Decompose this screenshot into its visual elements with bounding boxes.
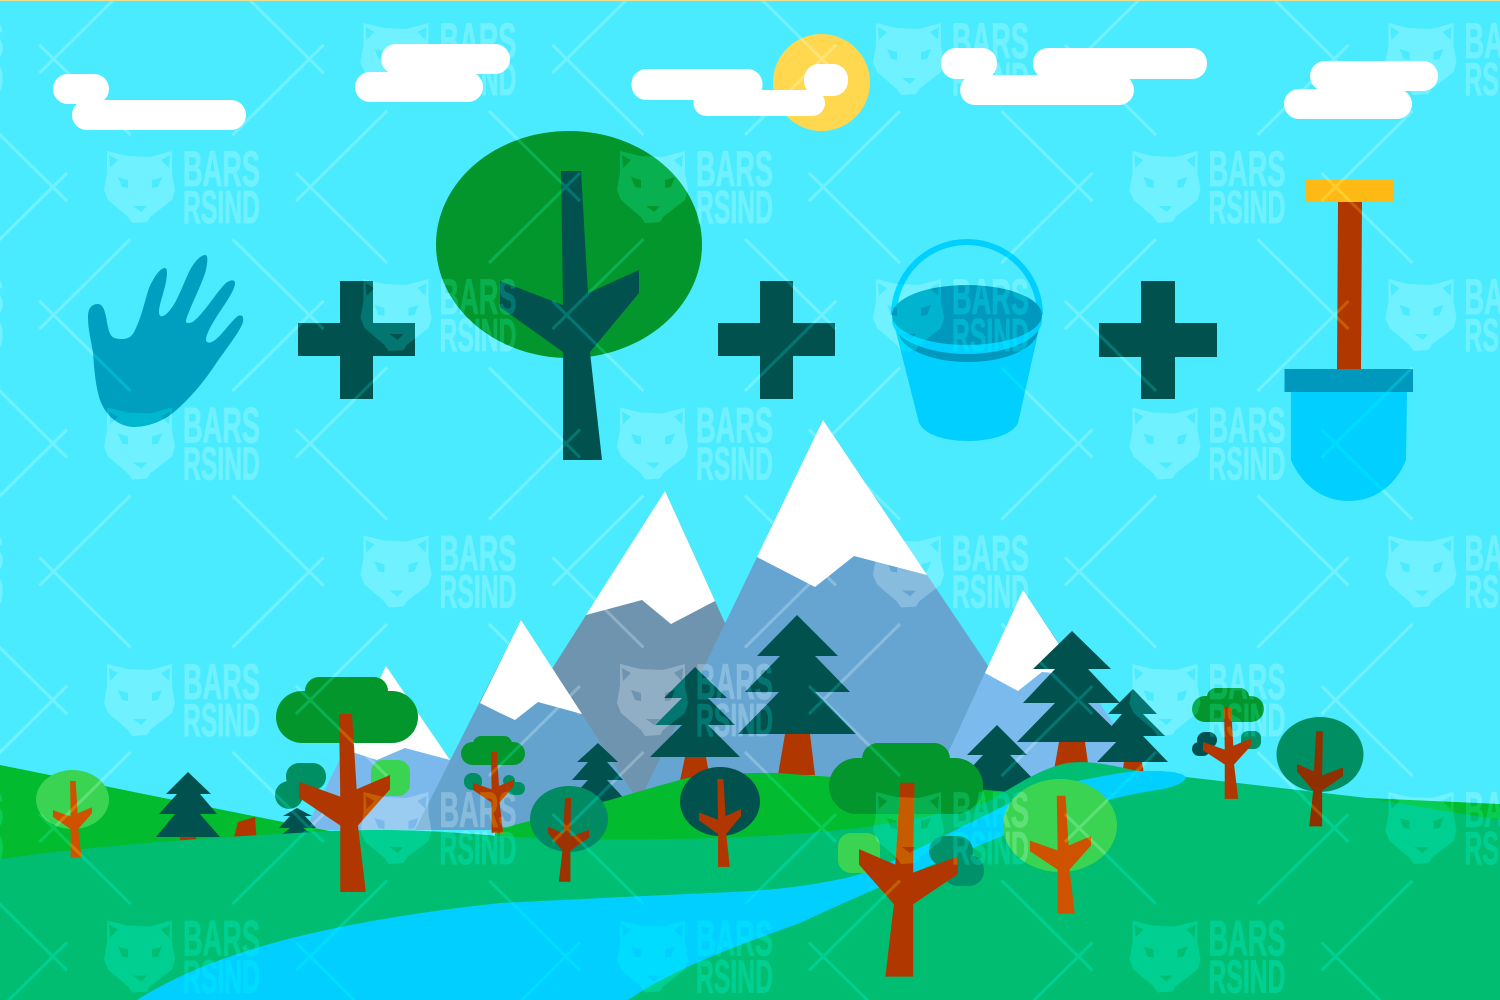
watermark pattern: BARS	[183, 398, 260, 454]
mountain: left blue	[415, 620, 657, 830]
watermark pattern: RSIND	[696, 181, 773, 233]
watermark pattern: BARS	[696, 910, 773, 966]
watermark pattern: BARS	[440, 13, 517, 69]
watermark pattern: RSIND	[952, 822, 1029, 874]
watermark pattern: RSIND	[696, 438, 773, 490]
watermark pattern: BARS	[1208, 910, 1286, 966]
icon: bucket	[892, 242, 1042, 441]
mountain: tallest	[640, 420, 1085, 810]
plus sign 2	[718, 281, 835, 399]
watermark pattern: BARS	[952, 526, 1029, 582]
watermark pattern: RSIND	[183, 181, 260, 233]
tree: small canopy	[461, 736, 525, 833]
watermark pattern: BARS	[183, 141, 260, 197]
watermark pattern: RSIND	[952, 566, 1029, 618]
watermark pattern: RSIND	[1208, 694, 1286, 746]
watermark pattern: RSIND	[440, 566, 516, 618]
watermark pattern: BARS	[1208, 141, 1286, 197]
tree: teal round right	[1276, 717, 1364, 826]
watermark pattern: BARS	[440, 526, 517, 582]
watermark pattern: BARS	[183, 654, 260, 710]
river	[137, 771, 1186, 1000]
tree: large canopy centre	[829, 743, 984, 977]
watermark pattern: BARS	[952, 269, 1029, 325]
watermark pattern: RSIND	[952, 309, 1029, 361]
mountain: far left	[305, 666, 498, 830]
plus sign 1	[298, 281, 415, 399]
icon: hand	[88, 255, 243, 427]
watermark pattern: BARS	[1208, 654, 1286, 710]
pine trees on the mountains	[563, 615, 1168, 807]
watermark pattern: RSIND	[440, 822, 516, 874]
clouds	[53, 44, 1438, 130]
watermark pattern: BARS	[696, 654, 773, 710]
tree: dark round	[680, 767, 760, 867]
mountain: grey	[494, 491, 760, 830]
tree: teal round	[530, 786, 608, 882]
watermark pattern: BARS	[440, 782, 517, 838]
icon: big tree	[436, 131, 702, 460]
watermark pattern: BARS	[952, 13, 1029, 69]
tree: light green right	[1003, 779, 1117, 914]
plus sign 3	[1099, 281, 1217, 399]
front land	[0, 762, 1500, 1000]
watermark pattern: BARS	[1208, 398, 1286, 454]
icon: shovel	[1284, 180, 1413, 501]
back hills	[0, 765, 1500, 880]
watermark pattern: RSIND	[1208, 438, 1286, 490]
watermark pattern: RSIND	[183, 694, 260, 746]
tree: large canopy left	[275, 677, 418, 892]
pine trees on the left hill	[156, 772, 320, 845]
watermark pattern: BARS	[952, 782, 1029, 838]
watermark pattern: RSIND	[440, 309, 516, 361]
watermark pattern: RSIND	[696, 694, 773, 746]
tree: light green left	[36, 770, 109, 858]
sun	[773, 34, 870, 131]
watermark pattern: RSIND	[183, 438, 260, 490]
watermark pattern: BARS	[696, 398, 773, 454]
watermark pattern: BARS	[696, 141, 773, 197]
watermark pattern: BARS	[183, 910, 260, 966]
tree: small canopy right	[1192, 688, 1264, 799]
watermark pattern: RSIND	[952, 53, 1029, 105]
mountain: right	[931, 590, 1145, 790]
watermark pattern: RSIND	[1208, 181, 1286, 233]
watermark pattern: RSIND	[440, 53, 516, 105]
watermark pattern: BARS	[440, 269, 517, 325]
